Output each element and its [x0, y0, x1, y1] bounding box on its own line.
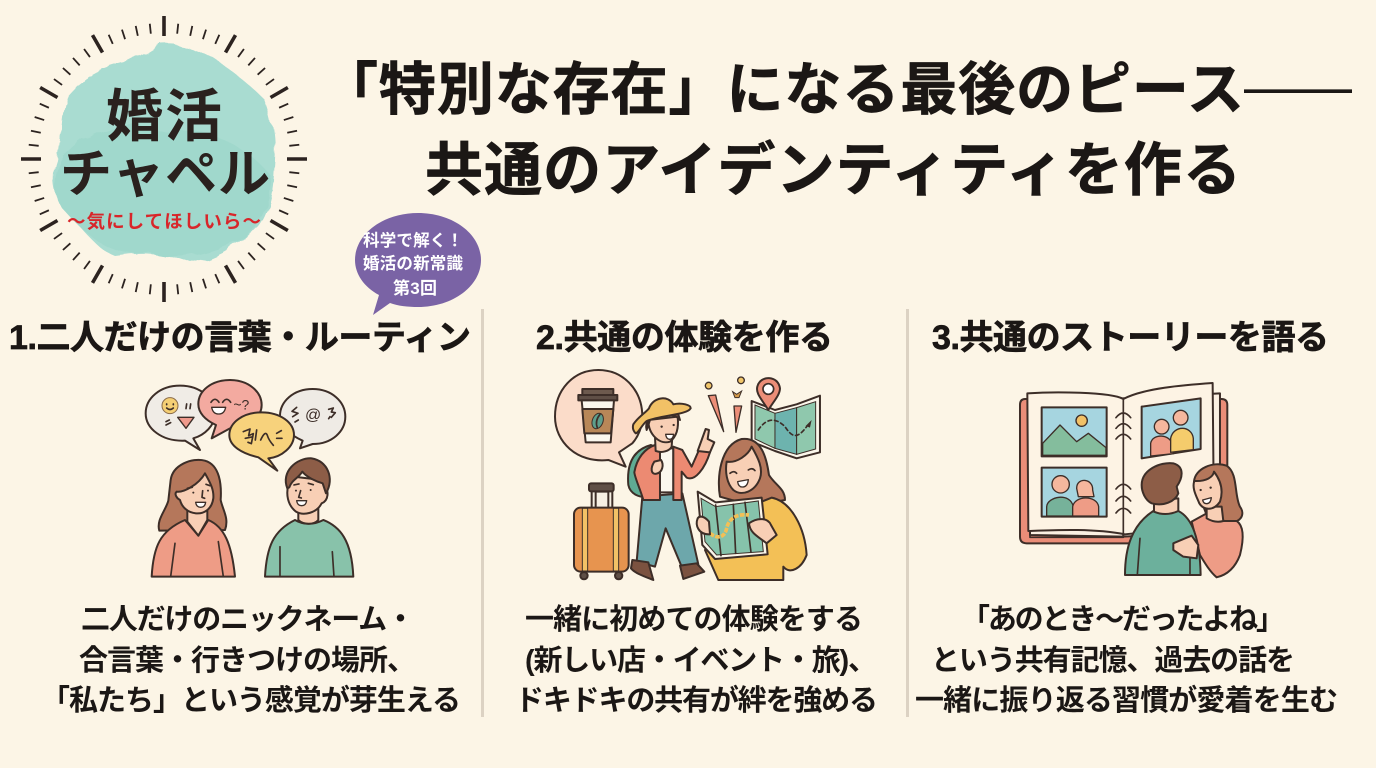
logo clock ticks [13, 8, 315, 310]
text: column 2: 一緒に初めての体験をする [525, 603, 863, 636]
title: 共通のアイデンティティを作る [425, 138, 1241, 203]
text: column 1 [41, 604, 461, 717]
icon: right white bubble [280, 389, 345, 448]
text: column 1: 合言葉・行きつけの場所、 [79, 644, 416, 677]
heading: column 3: 3.共通のストーリーを語る [932, 319, 1329, 357]
illustration: couple looking at a photo album [1020, 383, 1243, 577]
column dividers [481, 309, 484, 717]
text: column 3: 「あのとき〜だったよね」 [961, 603, 1285, 636]
album photo: landscape [1042, 407, 1107, 456]
album photo: portrait [1142, 398, 1201, 458]
icon: right white bubble: @ [305, 407, 321, 424]
icon: pink bubble: ~? [233, 396, 249, 412]
logo tagline: 〜気にしてほしいら〜 [67, 211, 261, 232]
callout: series badge: 第3回 [393, 278, 437, 298]
icon: suitcase [574, 483, 629, 579]
album photo: two people [1042, 468, 1107, 517]
icon: white bubble left [146, 386, 215, 450]
traveller man [628, 398, 714, 580]
text: column 3: という共有記憶、過去の話を [931, 644, 1295, 677]
woman facing man [1192, 464, 1243, 577]
title [321, 57, 1352, 203]
heading: column 1: 1.二人だけの言葉・ルーティン [9, 319, 471, 357]
logo name line 1: 婚活 [106, 85, 222, 149]
callout: series badge [355, 213, 481, 315]
illustration: travelling couple [555, 370, 820, 580]
icon: yellow bubble [229, 412, 294, 471]
photo album [1020, 383, 1227, 543]
text: column 1: 二人だけのニックネーム・ [81, 604, 415, 636]
title: —— [1244, 57, 1352, 117]
man [265, 458, 353, 577]
woman [152, 460, 235, 577]
icon: excitement marks [705, 377, 744, 432]
title: 「特別な存在」になる最後のピース [321, 58, 1244, 122]
icon: coffee bubble [555, 370, 642, 467]
text: column 3 [915, 603, 1338, 717]
logo watercolor blob [54, 45, 274, 264]
heading: column 2: 2.共通の体験を作る [536, 319, 833, 357]
text: column 2 [515, 603, 878, 717]
illustration: couple chatting with speech bubbles [146, 380, 353, 577]
icon: map with pin [752, 378, 820, 458]
text: column 2: ドキドキの共有が絆を強める [515, 683, 878, 717]
traveller woman [697, 439, 807, 580]
callout: series badge: 科学で解く！ [363, 230, 463, 250]
icon: pink bubble [198, 380, 262, 438]
text: column 3: 一緒に振り返る習慣が愛着を生む [915, 683, 1338, 717]
callout: series badge: 婚活の新常識 [363, 254, 464, 273]
logo: 婚活チャペル [13, 8, 315, 310]
text: column 2: (新しい店・イベント・旅)、 [525, 644, 877, 677]
logo name line 2: チャペル [60, 146, 270, 204]
man seen from behind [1125, 463, 1201, 575]
text: column 1: 「私たち」という感覚が芽生える [41, 683, 461, 717]
